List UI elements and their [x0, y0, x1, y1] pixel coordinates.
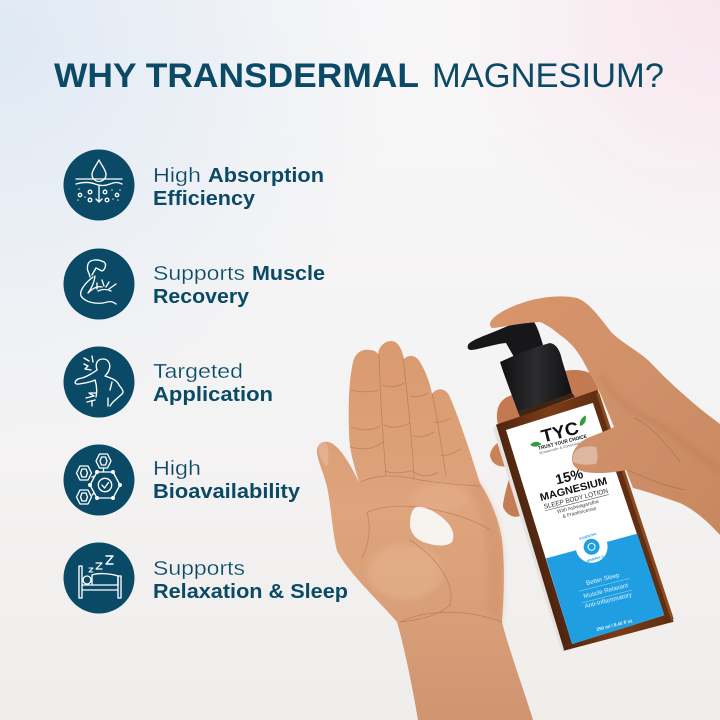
brand logo: TYC	[539, 418, 581, 447]
essential minerals badge: ESSENTIAL	[579, 532, 598, 541]
icon: flexed arm	[64, 248, 134, 320]
thumbnail	[318, 443, 328, 467]
label: high bioavailability	[153, 458, 301, 503]
label: supports muscle recovery	[153, 263, 325, 308]
thumb details	[573, 375, 720, 490]
label: supports relaxation and sleep: Supports	[153, 558, 245, 580]
icon: person sleeping in bed	[64, 542, 134, 614]
product name: SLEEP BODY LOTION	[543, 488, 609, 511]
bottle body	[492, 389, 674, 656]
brand logo: TRUST YOUR CHOICE	[538, 434, 588, 452]
label: high absorption efficiency: Efficiency	[153, 188, 256, 210]
benefit 2: supports muscle recovery	[64, 248, 325, 320]
icon: body with neck and back pain	[64, 346, 134, 418]
gripping hand with index finger and thumb	[490, 296, 720, 535]
benefits on label: 250 ml / 8.45 fl oz	[596, 618, 634, 632]
product name: With Ashwagandha	[557, 499, 600, 515]
product name	[535, 460, 614, 524]
label: high bioavailability: Bioavailability	[153, 481, 301, 503]
pump dispenser	[468, 319, 575, 417]
product name: 15%	[554, 465, 585, 487]
white label area	[505, 401, 664, 644]
product text group	[523, 414, 614, 524]
label: high bioavailability: High	[153, 458, 201, 480]
label: high absorption efficiency: High	[153, 165, 201, 187]
label: targeted application: Targeted	[153, 361, 243, 383]
amber bottle	[490, 389, 675, 656]
essential minerals badge: MINERALS	[586, 554, 605, 563]
lotion dollop	[410, 507, 453, 546]
palm shading and highlights	[367, 480, 504, 622]
icon: drop absorbing through skin	[64, 150, 134, 220]
hand holding bottle	[468, 296, 720, 656]
brand logo	[526, 415, 592, 457]
open hand with lotion	[317, 341, 533, 720]
open palm and wrist	[317, 341, 533, 720]
label: targeted application: Application	[153, 384, 273, 406]
essential minerals badge	[572, 527, 612, 567]
benefit 1: high absorption efficiency	[64, 150, 324, 220]
label: supports muscle recovery: Muscle	[252, 263, 325, 285]
label: supports relaxation and sleep	[153, 558, 348, 603]
label: supports muscle recovery: Supports	[153, 263, 245, 285]
blue lower label	[545, 530, 664, 644]
benefits on label: Muscle Relaxant	[583, 582, 629, 600]
back fingers behind bottle	[490, 370, 600, 517]
product name: & Frankincense	[562, 506, 597, 520]
icon: molecule with check mark	[64, 444, 134, 516]
finger and palm creases	[350, 355, 502, 622]
brand logo: Botanicals & Essential Oils	[539, 439, 589, 455]
benefit 4: high bioavailability	[64, 444, 301, 516]
benefits on label: Better Sleep	[586, 572, 621, 587]
benefit 3: targeted application	[64, 346, 273, 418]
label: supports relaxation and sleep: Relaxation & Sleep	[153, 581, 348, 603]
title: MAGNESIUM?	[432, 57, 664, 95]
product name: MAGNESIUM	[539, 475, 609, 504]
benefits on label	[577, 570, 640, 634]
label: targeted application	[153, 361, 273, 406]
benefit 5: supports relaxation and sleep	[64, 542, 348, 614]
benefits on label: Anti-Inflammatory	[584, 591, 634, 610]
label: high absorption efficiency	[153, 165, 324, 210]
label: high absorption efficiency: Absorption	[208, 165, 324, 187]
title: WHY TRANSDERMAL	[54, 57, 419, 95]
label: supports muscle recovery: Recovery	[153, 286, 250, 308]
